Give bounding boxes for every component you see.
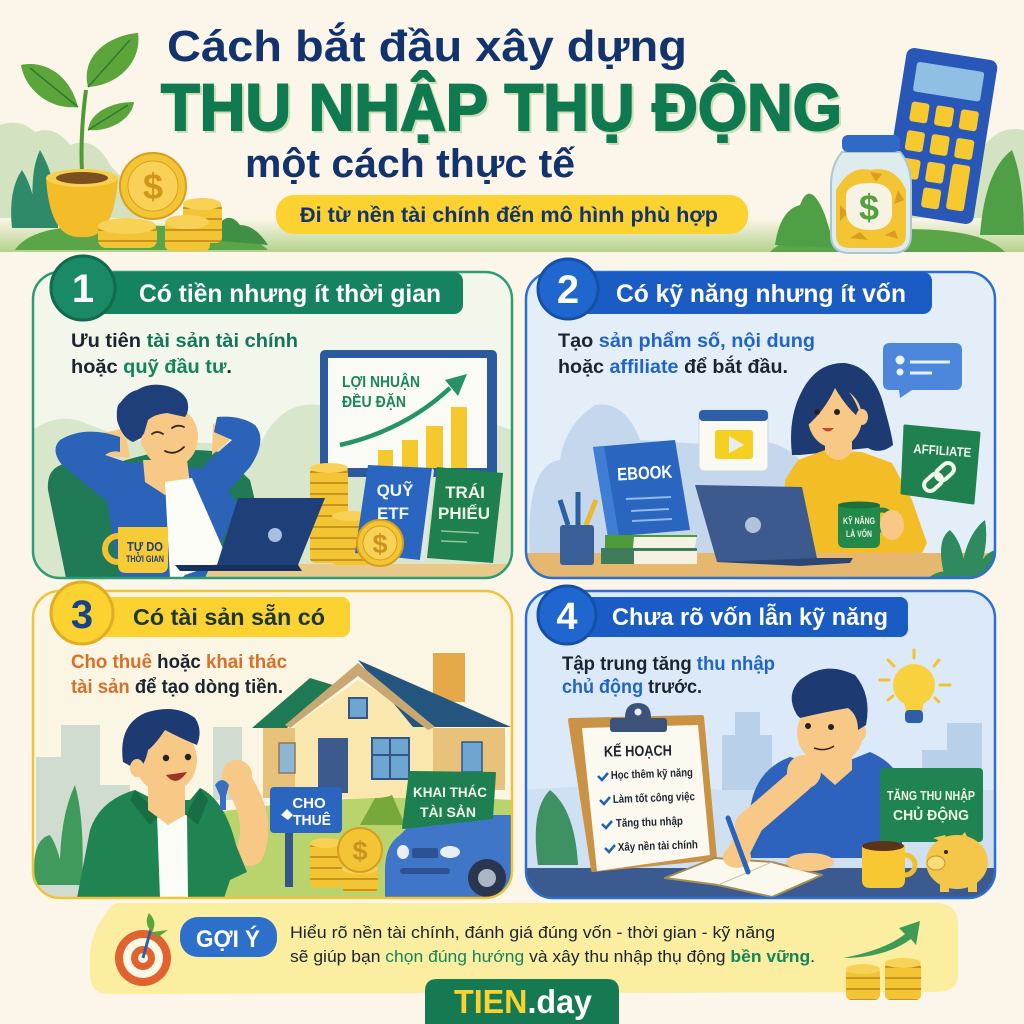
- header bar 1: Có tiền nhưng ít thời gian: [139, 280, 441, 308]
- title line 1: Cách bắt đầu xây dựng: [167, 21, 687, 71]
- header bar 3: 3: [71, 593, 93, 637]
- subtitle pill: Đi từ nền tài chính đến mô hình phù hợp: [300, 204, 718, 227]
- tip text: [290, 923, 815, 966]
- tip text: Hiểu rõ nền tài chính, đánh giá đúng vốn - thời gian - kỹ năng: [290, 923, 775, 942]
- sign: cho thuê: CHO: [292, 795, 326, 812]
- label pill: [180, 917, 277, 957]
- coins: [846, 958, 921, 1000]
- clipboard with plan: [570, 703, 715, 871]
- left plant: [536, 790, 578, 865]
- body text 1: Ưu tiên tài sản tài chính: [71, 331, 298, 352]
- grass: [200, 797, 512, 898]
- icon: coin jar: $: [859, 187, 879, 228]
- mug: tự do thời gian: [105, 527, 168, 573]
- ebook: EBOOK: [617, 462, 673, 484]
- stacked books: [601, 535, 697, 564]
- background buildings: [36, 725, 242, 898]
- armchair: [48, 450, 256, 578]
- body text 4: [562, 654, 775, 698]
- header scenery: hills and ground: [0, 123, 1024, 252]
- clipboard with plan: Xây nền tài chính: [618, 839, 698, 854]
- sign: khai thác tài sản: TÀI SẢN: [420, 804, 476, 820]
- ebook: [593, 440, 690, 537]
- video window: [699, 410, 768, 471]
- header bar 4: 4: [556, 596, 578, 638]
- tall coin stack: [310, 463, 370, 565]
- coins: $: [352, 836, 368, 866]
- header bar 4: [538, 586, 908, 644]
- green board: [880, 768, 983, 842]
- affiliate tag: [902, 426, 979, 503]
- body text 4: Tập trung tăng thu nhập: [562, 654, 775, 675]
- header bar 3: Có tài sản sẵn có: [133, 603, 325, 630]
- gold coin: $: [372, 529, 388, 559]
- book: TRÁI PHIẾU: TRÁI: [445, 483, 485, 502]
- plant: [928, 520, 995, 578]
- laptop: [175, 498, 325, 571]
- green mug: KỸ NĂNG: [843, 516, 875, 526]
- sign: khai thác tài sản: KHAI THÁC: [413, 784, 487, 800]
- piggy bank: [926, 832, 988, 892]
- speech bubble: [883, 343, 962, 398]
- coins: [310, 828, 382, 892]
- header bar 2: Có kỹ năng nhưng ít vốn: [616, 280, 906, 308]
- pencil cup: [560, 492, 596, 565]
- icon: gold coins left: $: [143, 166, 163, 207]
- house: [252, 653, 511, 825]
- desk: [526, 868, 995, 898]
- tip banner: [90, 903, 958, 1000]
- woman with mug: [785, 363, 927, 553]
- body text 2: Tạo sản phẩm số, nội dung: [558, 331, 815, 352]
- book: TRÁI PHIẾU: [427, 467, 503, 563]
- book: QUỸ ETF: QUỸ: [377, 480, 414, 500]
- sign: cho thuê: [270, 787, 342, 887]
- header bar 4: Chưa rõ vốn lẫn kỹ năng: [612, 603, 888, 631]
- icon: plant in yellow pot: [21, 33, 138, 237]
- panel 1: money but little time: [33, 256, 512, 578]
- key: [215, 780, 229, 810]
- title line 3: một cách thực tế: [245, 142, 576, 186]
- body text 2: hoặc affiliate để bắt đầu.: [558, 356, 788, 378]
- arrow up: [843, 921, 920, 958]
- clipboard with plan: KẾ HOẠCH: [604, 742, 672, 761]
- man relaxing: [55, 385, 260, 578]
- green board: TĂNG THU NHẬP: [887, 788, 975, 803]
- light bulb: [880, 650, 950, 723]
- panel 3: existing assets: [33, 582, 512, 898]
- green mug: LÀ VỐN: [846, 528, 872, 539]
- clipboard with plan: Học thêm kỹ năng: [611, 767, 693, 782]
- book: QUỸ ETF: ETF: [377, 504, 409, 523]
- mug: tự do thời gian: THỜI GIAN: [126, 553, 164, 564]
- desk: [206, 564, 508, 577]
- book: QUỸ ETF: [355, 465, 434, 562]
- body text 1: hoặc quỹ đầu tư .: [71, 357, 232, 378]
- man thinking: [737, 669, 902, 858]
- left plant: [34, 785, 83, 885]
- header bar 1: [51, 256, 463, 320]
- icon: target with darts: [115, 913, 171, 986]
- sign: cho thuê: THUÊ: [293, 811, 331, 829]
- mug: [862, 841, 915, 888]
- book: TRÁI PHIẾU: PHIẾU: [438, 504, 490, 523]
- green mug: [838, 502, 904, 548]
- header bar 2: [538, 259, 932, 319]
- icon: calculator: [882, 47, 998, 225]
- logo: [425, 979, 619, 1024]
- monitor with chart: LỢI NHUẬN: [342, 372, 420, 391]
- background hills: [33, 391, 512, 578]
- open notebook: [665, 818, 834, 897]
- body text 4: chủ động trước.: [562, 677, 702, 698]
- mug: tự do thời gian: TỰ DO: [127, 539, 163, 554]
- header bar 2: 2: [557, 268, 579, 312]
- header bar 1: 1: [72, 267, 94, 311]
- label pill: GỢI Ý: [196, 925, 260, 953]
- header bar 3: [51, 582, 350, 644]
- body text 2: [558, 331, 815, 378]
- panel 2: skills but little capital: [526, 259, 995, 578]
- icon: coin jar: [831, 135, 911, 253]
- gold coin: [357, 520, 403, 566]
- title line 2: THU NHẬP THỤ ĐỘNG: [161, 70, 842, 144]
- body text 3: Cho thuê hoặc khai thác: [71, 652, 287, 673]
- body text 3: tài sản để tạo dòng tiền.: [71, 677, 283, 698]
- panel 4: no clear capital or skills: [526, 586, 995, 898]
- body text 1: [71, 331, 298, 378]
- background clouds: [529, 404, 800, 555]
- tip text: sẽ giúp bạn chọn đúng hướng và xây thu nhập thụ động bền vững.: [290, 947, 815, 966]
- laptop: [695, 485, 853, 566]
- clipboard with plan: Tăng thu nhập: [616, 816, 683, 830]
- monitor with chart: [320, 350, 497, 477]
- desk: [527, 553, 995, 578]
- sign: khai thác tài sản: [403, 772, 495, 828]
- green board: CHỦ ĐỘNG: [893, 806, 969, 824]
- body text 3: [71, 652, 287, 698]
- background buildings: [722, 712, 982, 790]
- icon: gold coins left: [98, 153, 222, 251]
- affiliate tag: AFFILIATE: [913, 441, 972, 460]
- man with key: [77, 709, 254, 898]
- blue car: [385, 815, 512, 897]
- monitor with chart: ĐỀU ĐẶN: [342, 392, 406, 411]
- subtitle pill: [276, 195, 748, 234]
- logo: TIEN.day: [454, 983, 593, 1020]
- clipboard with plan: Làm tốt công việc: [613, 791, 696, 806]
